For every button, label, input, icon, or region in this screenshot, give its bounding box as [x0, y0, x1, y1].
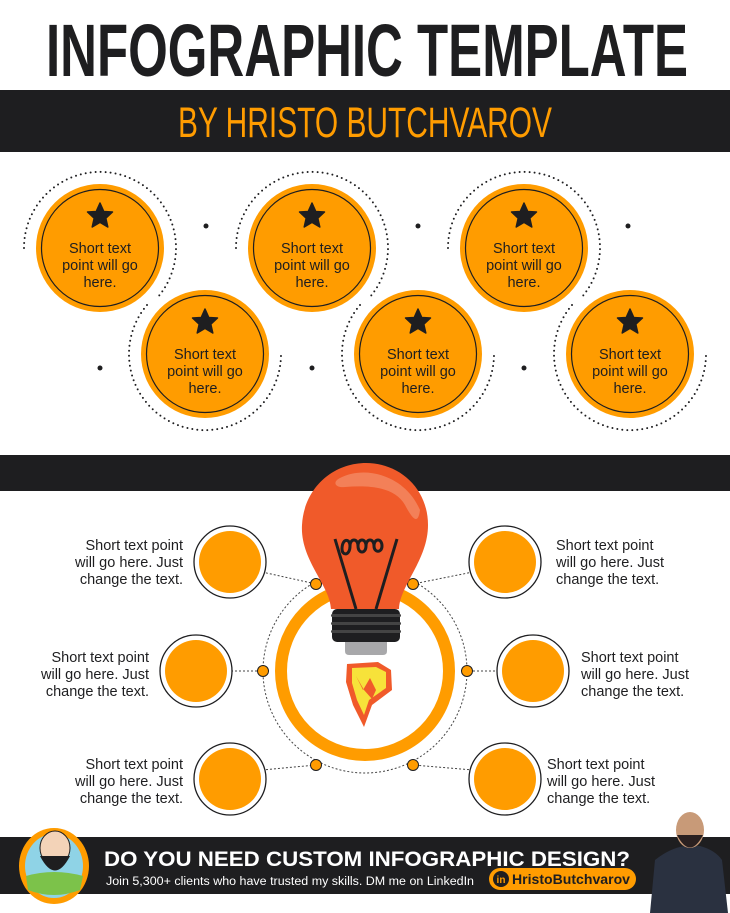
text blocks left: change the text.: [46, 684, 149, 700]
text blocks right: Short text point: [556, 538, 654, 554]
circle item 6: [566, 290, 694, 418]
circle item 3: Short text: [493, 241, 555, 257]
text blocks right: change the text.: [556, 572, 659, 588]
circle item 5: point will go: [380, 364, 456, 380]
text blocks right: Short text point: [581, 650, 679, 666]
footer banner: Join 5,300+ clients who have trusted my skills. DM me on LinkedIn: [106, 876, 474, 888]
text blocks left: change the text.: [80, 791, 183, 807]
circle item 6: point will go: [592, 364, 668, 380]
circle item 5: here.: [401, 381, 435, 397]
text blocks left: Short text point: [85, 757, 183, 773]
circle item 5: [354, 290, 482, 418]
text blocks right: change the text.: [581, 684, 684, 700]
circle item 4: point will go: [167, 364, 243, 380]
linkedin badge: [489, 868, 636, 890]
circle item 6: here.: [613, 381, 647, 397]
circle item 5: Short text: [387, 347, 449, 363]
subtitle band: BY HRISTO BUTCHVAROV: [178, 99, 552, 147]
text blocks left: Short text point: [51, 650, 149, 666]
circle item 4: [141, 290, 269, 418]
circle item 1: here.: [83, 275, 117, 291]
linkedin badge: HristoButchvarov: [512, 872, 631, 887]
text blocks left: Short text point: [85, 538, 183, 554]
text blocks left: [40, 538, 183, 807]
photo: [650, 812, 728, 913]
text blocks left: will go here. Just: [40, 667, 149, 683]
circle item 3: [460, 184, 588, 312]
linkedin badge: in: [497, 875, 505, 886]
text blocks right: will go here. Just: [580, 667, 689, 683]
panel: bulb diagram: [40, 463, 689, 815]
text blocks right: Short text point: [547, 757, 645, 773]
icon: lightbulb rocket: [302, 463, 428, 727]
circle item 1: Short text: [69, 241, 131, 257]
circle item 6: Short text: [599, 347, 661, 363]
circle item 2: Short text: [281, 241, 343, 257]
circle item 3: point will go: [486, 258, 562, 274]
circle item 3: here.: [507, 275, 541, 291]
circle item 2: here.: [295, 275, 329, 291]
section band: [0, 455, 730, 491]
circle item 4: here.: [188, 381, 222, 397]
circle item 1: point will go: [62, 258, 138, 274]
text blocks right: [546, 538, 689, 807]
text blocks right: change the text.: [547, 791, 650, 807]
circle item 2: point will go: [274, 258, 350, 274]
panel: circle points: [24, 172, 706, 430]
text blocks right: will go here. Just: [546, 774, 655, 790]
footer banner: [0, 812, 730, 913]
avatar: [19, 828, 89, 904]
text blocks left: will go here. Just: [74, 555, 183, 571]
text blocks left: change the text.: [80, 572, 183, 588]
text blocks left: will go here. Just: [74, 774, 183, 790]
circle item 4: Short text: [174, 347, 236, 363]
footer banner: DO YOU NEED CUSTOM INFOGRAPHIC DESIGN?: [104, 848, 630, 871]
circle item 1: [36, 184, 164, 312]
circle item 2: [248, 184, 376, 312]
text blocks right: will go here. Just: [555, 555, 664, 571]
subtitle band: [0, 90, 730, 152]
